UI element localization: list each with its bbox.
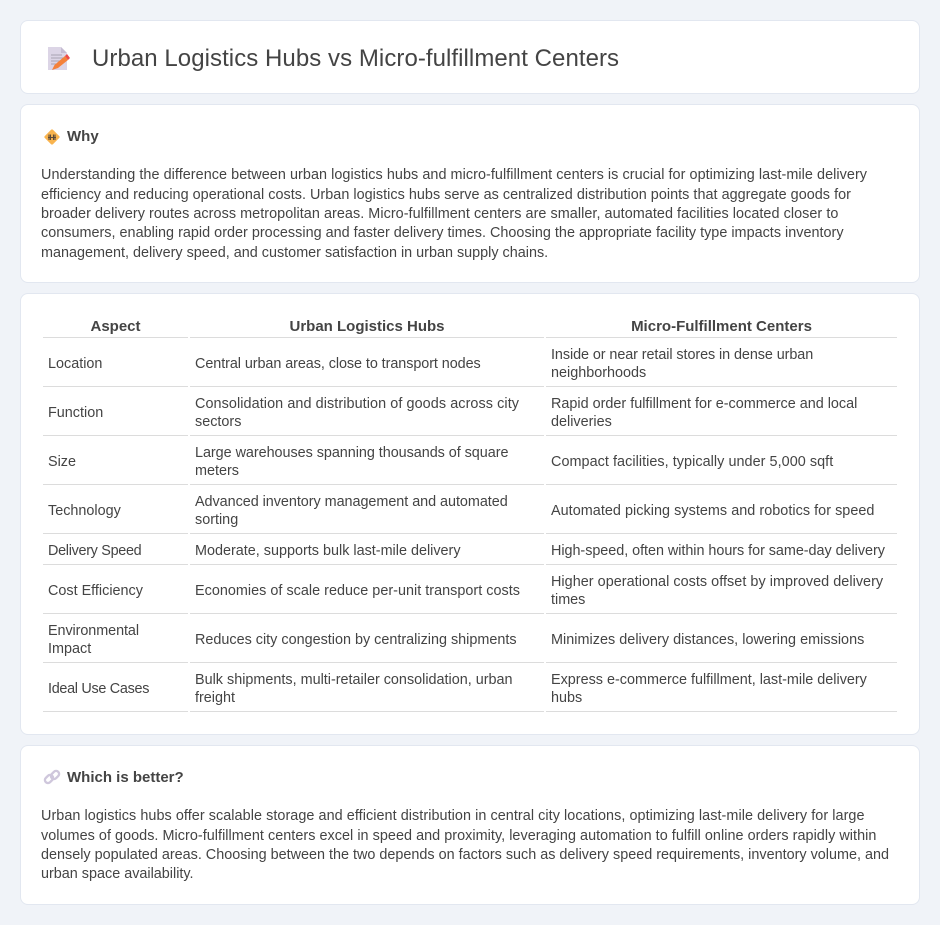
table row: size: Large warehouses spanning thousands of square	[195, 445, 508, 461]
text block: why	[41, 167, 867, 261]
table row: environmental impact: Environmental	[48, 623, 139, 639]
table row: function: Function	[48, 405, 103, 421]
panel: comparison table	[20, 293, 920, 735]
table header: Micro-Fulfillment Centers	[631, 318, 812, 335]
table row: function: Consolidation and distribution of goods across city	[195, 396, 519, 412]
heading: which is better: Which is better?	[67, 769, 184, 786]
table row: delivery speed	[43, 543, 897, 565]
table row: technology: Automated picking systems and robotics for speed	[551, 503, 874, 519]
table row: technology: Advanced inventory management and automated	[195, 494, 508, 510]
panel: why	[20, 104, 920, 283]
panel: which is better	[20, 745, 920, 905]
table row: location: Inside or near retail stores in dense urban	[551, 347, 813, 363]
text block: which is better: urban space availability.	[41, 866, 194, 882]
table row: ideal use cases: freight	[195, 690, 235, 706]
text block: why: management, delivery speed, and customer satisfaction in urban supply chains.	[41, 245, 548, 261]
table row: delivery speed: Moderate, supports bulk last-mile delivery	[195, 543, 461, 559]
icon: diamond road sign	[44, 129, 60, 145]
text block: which is better	[41, 808, 889, 882]
table row: delivery speed: Delivery Speed	[48, 543, 141, 559]
table row: function	[43, 396, 897, 436]
text block: which is better: volumes of goods. Micro-fulfillment centers excel in speed and proximity, leveraging automation to fulfill online orders rapidly within	[41, 828, 876, 844]
table row: technology: Technology	[48, 503, 121, 519]
table row: size: meters	[195, 463, 239, 479]
table row: cost efficiency	[43, 574, 897, 614]
heading: why: Why	[67, 128, 99, 145]
table row: environmental impact	[43, 623, 897, 663]
table row: technology: sorting	[195, 512, 238, 528]
table row: environmental impact: Reduces city congestion by centralizing shipments	[195, 632, 517, 648]
table row: cost efficiency: Higher operational costs offset by improved delivery	[551, 574, 883, 590]
table row: cost efficiency: times	[551, 592, 585, 608]
text block: which is better: densely populated areas. Choosing between the two depends on factors such as delivery speed requirements, inventory volume, and	[41, 847, 889, 863]
table row: location: neighborhoods	[551, 365, 646, 381]
table row: ideal use cases: Bulk shipments, multi-retailer consolidation, urban	[195, 672, 513, 688]
table row: technology	[43, 494, 897, 534]
table row: ideal use cases: Express e-commerce fulfillment, last-mile delivery	[551, 672, 867, 688]
panel: header	[20, 20, 920, 94]
icon: chain link	[44, 770, 60, 784]
icon: document with pencil	[48, 47, 70, 70]
table row: location: Central urban areas, close to transport nodes	[195, 356, 481, 372]
text block: which is better: Urban logistics hubs offer scalable storage and efficient distribution in central city locations, optimizing last-mile delivery for large	[41, 808, 865, 824]
table row: cost efficiency: Cost Efficiency	[48, 583, 143, 599]
text block: why: consumers, enabling rapid order processing and faster delivery times. Choosing the appropriate facility type impacts inventory	[41, 225, 844, 241]
table row: size	[43, 445, 897, 485]
table row: function: deliveries	[551, 414, 612, 430]
table header	[43, 318, 897, 338]
table row: size: Compact facilities, typically under 5,000 sqft	[551, 454, 833, 470]
table header: Urban Logistics Hubs	[289, 318, 445, 335]
table row: ideal use cases: Ideal Use Cases	[48, 681, 149, 697]
text block: why: efficiency and reducing operational costs. Urban logistics hubs serve as centralized distribution points that aggregate goods for	[41, 186, 851, 202]
table row: ideal use cases	[43, 672, 897, 712]
table row: cost efficiency: Economies of scale reduce per-unit transport costs	[195, 583, 520, 599]
text block: why: broader delivery routes across metropolitan areas. Micro-fulfillment centers are smaller, automated facilities located closer to	[41, 206, 838, 222]
text block: why: Understanding the difference between urban logistics hubs and micro-fulfillment centers is crucial for optimizing last-mile delivery	[41, 167, 867, 183]
table row: location: Location	[48, 356, 102, 372]
table row: environmental impact: Minimizes delivery distances, lowering emissions	[551, 632, 864, 648]
table row: function: Rapid order fulfillment for e-commerce and local	[551, 396, 857, 412]
table row: function: sectors	[195, 414, 241, 430]
table row: ideal use cases: hubs	[551, 690, 582, 706]
title: Urban Logistics Hubs vs Micro-fulfillment Centers	[92, 45, 619, 72]
table row: environmental impact: Impact	[48, 641, 91, 657]
table row: size: Size	[48, 454, 76, 470]
table row: delivery speed: High-speed, often within hours for same-day delivery	[551, 543, 885, 559]
table header: Aspect	[90, 318, 141, 335]
table row: location	[43, 347, 897, 387]
